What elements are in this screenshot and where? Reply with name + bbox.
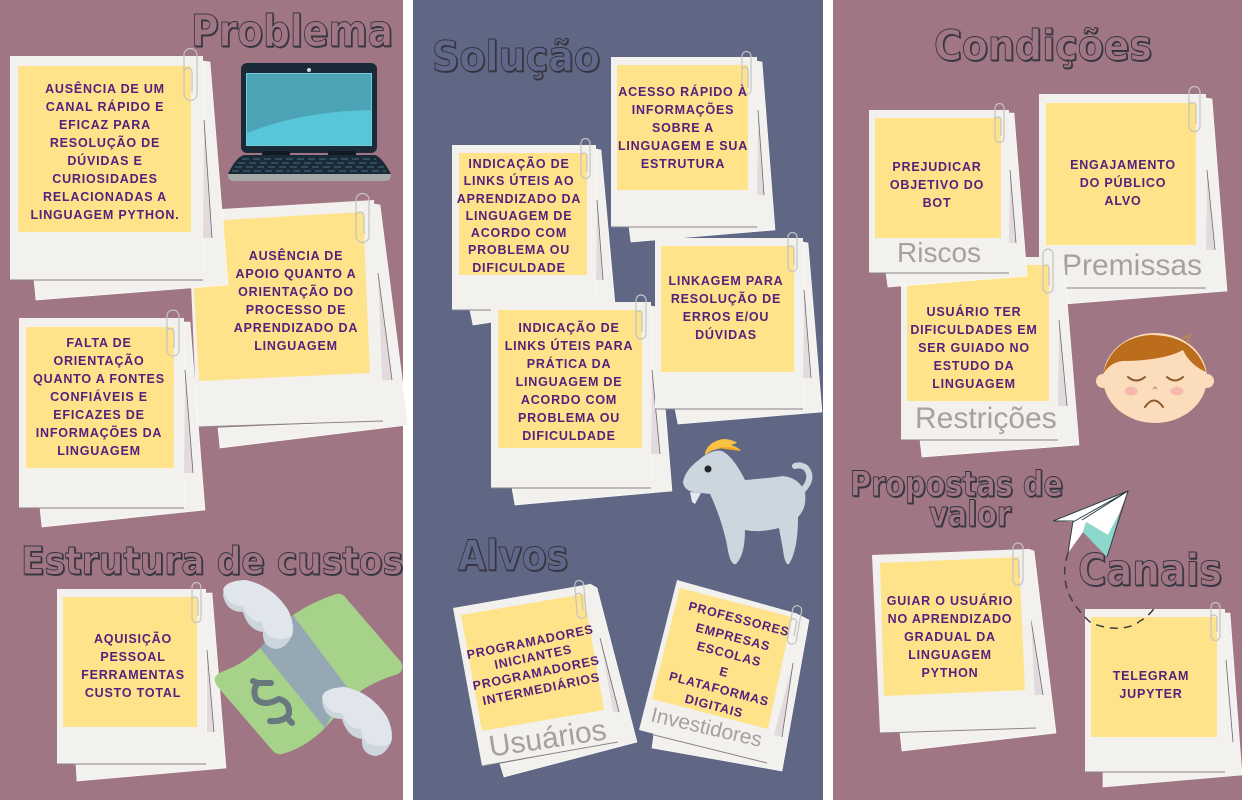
text: professores: PROFESSORES — [687, 599, 791, 639]
text: telegram: TELEGRAM — [1113, 669, 1189, 683]
text: acesso rápido: LINGUAGEM E SUA — [618, 139, 748, 153]
text: professores: DIGITAIS — [683, 692, 745, 721]
panel: note links ao aprendizado — [452, 138, 615, 325]
text: aquisição: AQUISIÇÃO — [94, 631, 172, 646]
panel: right background — [833, 0, 1242, 800]
label: Premissas: Premissas — [1062, 249, 1202, 282]
panel: note falta de orientação — [19, 310, 205, 527]
text: links para prática: ACORDO COM — [521, 393, 617, 407]
text: ausência de um canal: DÚVIDAS E — [67, 153, 143, 168]
text: links para prática: DIFICULDADE — [522, 429, 616, 443]
panel: note ausência de apoio — [188, 194, 408, 448]
text: ausência de apoio: AUSÊNCIA DE — [249, 248, 343, 263]
text: ausência de um canal: EFICAZ PARA — [59, 118, 151, 132]
text: ausência de um canal: CURIOSIDADES — [52, 172, 158, 186]
text: guiar: GRADUAL DA — [904, 630, 996, 644]
text: acesso rápido: ACESSO RÁPIDO À — [618, 84, 748, 99]
panel: note aquisição — [57, 582, 226, 781]
text: riscos: BOT — [923, 196, 951, 210]
text: programadores: INICIANTES — [493, 642, 573, 672]
text: professores: E — [718, 664, 730, 680]
text: ausência de apoio: ORIENTAÇÃO DO — [238, 284, 354, 299]
text: links ao aprendizado: ACORDO COM — [471, 226, 567, 240]
text: links ao aprendizado: INDICAÇÃO DE — [468, 156, 570, 171]
text: riscos: OBJETIVO DO — [890, 178, 984, 192]
text: falta de orientação: FALTA DE — [66, 336, 132, 350]
label: Restrições: Restrições — [915, 402, 1057, 435]
text: programadores: PROGRAMADORES — [472, 653, 601, 693]
arrow: dashed flight path — [1065, 553, 1157, 628]
text: restrições: LINGUAGEM — [932, 377, 1016, 391]
text: restrições: ESTUDO DA — [934, 359, 1014, 373]
text: links ao aprendizado: APRENDIZADO DA — [457, 192, 581, 206]
heading: Propostas de valor: valor — [929, 495, 1012, 535]
icon: laptop — [228, 63, 391, 181]
heading: Canais: Canais — [1078, 545, 1222, 596]
icon: paper clip — [192, 582, 201, 622]
text: riscos: PREJUDICAR — [892, 160, 982, 174]
text: ausência de apoio: LINGUAGEM — [254, 339, 338, 353]
panel: note usuários — [453, 580, 637, 777]
heading: Alvos: Alvos — [458, 531, 568, 580]
text: aquisição: PESSOAL — [100, 650, 166, 664]
icon: paper clip — [581, 138, 590, 178]
text: guiar: NO APRENDIZADO — [888, 612, 1012, 626]
text: falta de orientação: QUANTO A FONTES — [33, 372, 165, 386]
text: ausência de um canal: LINGUAGEM PYTHON. — [30, 208, 180, 222]
text: restrições: USUÁRIO TER — [927, 304, 1021, 319]
text: links para prática: INDICAÇÃO DE — [518, 320, 620, 335]
text: falta de orientação: INFORMAÇÕES DA — [36, 425, 162, 440]
panel: note guiar — [872, 543, 1056, 751]
icon: paper clip — [184, 48, 197, 101]
text: links para prática: LINGUAGEM DE — [516, 375, 622, 389]
icon: paper clip — [1013, 543, 1023, 585]
text: links ao aprendizado: PROBLEMA OU — [468, 243, 570, 257]
text: ausência de apoio: PROCESSO DE — [246, 303, 346, 317]
icon: paper clip — [742, 52, 751, 94]
text: programadores: PROGRAMADORES — [466, 622, 595, 662]
text: restrições: DIFICULDADES EM — [910, 323, 1038, 337]
panel: note linkagem — [655, 232, 822, 424]
panel: note riscos — [869, 104, 1027, 287]
panel: note premissas — [1039, 87, 1227, 304]
panel: note restrições — [901, 249, 1079, 457]
text: professores: ESCOLAS — [695, 639, 763, 669]
icon: paper clip — [1189, 87, 1200, 132]
text: falta de orientação: LINGUAGEM — [57, 444, 141, 458]
heading: Propostas de valor: Propostas de — [850, 465, 1063, 505]
panel: middle background — [413, 0, 823, 800]
text: guiar: GUIAR O USUÁRIO — [887, 593, 1013, 608]
text: acesso rápido: INFORMAÇÕES — [632, 102, 734, 117]
text: aquisição: FERRAMENTAS — [81, 668, 185, 682]
text: links ao aprendizado: DIFICULDADE — [472, 261, 566, 275]
text: linkagem: ERROS E/OU — [683, 310, 769, 324]
icon: paper clip — [1043, 249, 1053, 293]
text: links para prática: LINKS ÚTEIS PARA — [505, 338, 633, 353]
label: Usuários: Usuários — [487, 714, 609, 764]
text: ausência de um canal: RELACIONADAS A — [43, 190, 167, 204]
text: ausência de um canal: AUSÊNCIA DE UM — [45, 81, 165, 96]
icon: sad face — [1096, 333, 1214, 423]
panel: note investidores — [639, 580, 809, 771]
text: premissas: ALVO — [1104, 194, 1142, 208]
text: falta de orientação: EFICAZES DE — [53, 408, 145, 422]
text: ausência de apoio: APRENDIZADO DA — [234, 321, 358, 335]
icon: paper clip — [995, 104, 1004, 142]
panel: note links para prática — [491, 295, 672, 505]
text: ausência de apoio: APOIO QUANTO A — [236, 267, 356, 281]
text: guiar: LINGUAGEM — [908, 648, 992, 662]
text: premissas: DO PÚBLICO — [1080, 175, 1166, 190]
panel: left background — [0, 0, 403, 800]
icon: paper plane — [1053, 491, 1128, 557]
text: programadores — [466, 622, 601, 708]
text: ausência de um canal: RESOLUÇÃO DE — [50, 135, 160, 150]
icon: flying money — [215, 580, 402, 756]
text: professores — [668, 599, 791, 721]
panel: note telegram — [1085, 602, 1242, 787]
icon: paper clip — [167, 310, 179, 356]
panel: note ausência de um canal — [10, 48, 228, 300]
text: premissas: ENGAJAMENTO — [1070, 158, 1176, 172]
text: linkagem: LINKAGEM PARA — [668, 274, 784, 288]
panel: note acesso rápido — [611, 52, 775, 242]
icon: goat — [683, 439, 809, 564]
heading: Estrutura de custos: Estrutura de custos — [21, 539, 403, 583]
icon: paper clip — [787, 605, 802, 645]
text: falta de orientação: CONFIÁVEIS E — [50, 389, 148, 404]
text: falta de orientação: ORIENTAÇÃO — [53, 353, 145, 368]
icon: paper clip — [574, 580, 587, 619]
icon: paper clip — [356, 194, 369, 242]
text: telegram: JUPYTER — [1119, 687, 1183, 701]
icon: paper clip — [1211, 602, 1220, 640]
icon: paper clip — [636, 295, 646, 339]
icon: paper clip — [788, 232, 797, 272]
heading: Condições: Condições — [934, 21, 1152, 70]
text: aquisição: CUSTO TOTAL — [85, 686, 181, 700]
text: ausência de um canal: CANAL RÁPIDO E — [46, 99, 164, 114]
label: Investidores: Investidores — [649, 703, 764, 752]
text: guiar: PYTHON — [922, 666, 978, 680]
text: acesso rápido: ESTRUTURA — [641, 157, 725, 171]
text: acesso rápido: SOBRE A — [652, 121, 714, 135]
heading: Problema: Problema — [191, 6, 393, 57]
heading: Solução: Solução — [432, 32, 600, 81]
text: professores: EMPRESAS — [694, 621, 772, 654]
text: professores: PLATAFORMAS — [668, 669, 770, 709]
text: links ao aprendizado: LINGUAGEM DE — [466, 209, 572, 223]
heading: Propostas de valor — [850, 465, 1063, 535]
text: restrições: SER GUIADO NO — [918, 341, 1030, 355]
text: programadores: INTERMEDIÁRIOS — [481, 669, 601, 708]
text: links para prática: PRÁTICA DA — [527, 356, 611, 371]
text: linkagem: RESOLUÇÃO DE — [671, 291, 781, 306]
text: links para prática: PROBLEMA OU — [518, 411, 620, 425]
text: linkagem: DÚVIDAS — [695, 327, 757, 342]
text: links ao aprendizado: LINKS ÚTEIS AO — [464, 173, 574, 188]
label: Riscos: Riscos — [897, 237, 981, 268]
